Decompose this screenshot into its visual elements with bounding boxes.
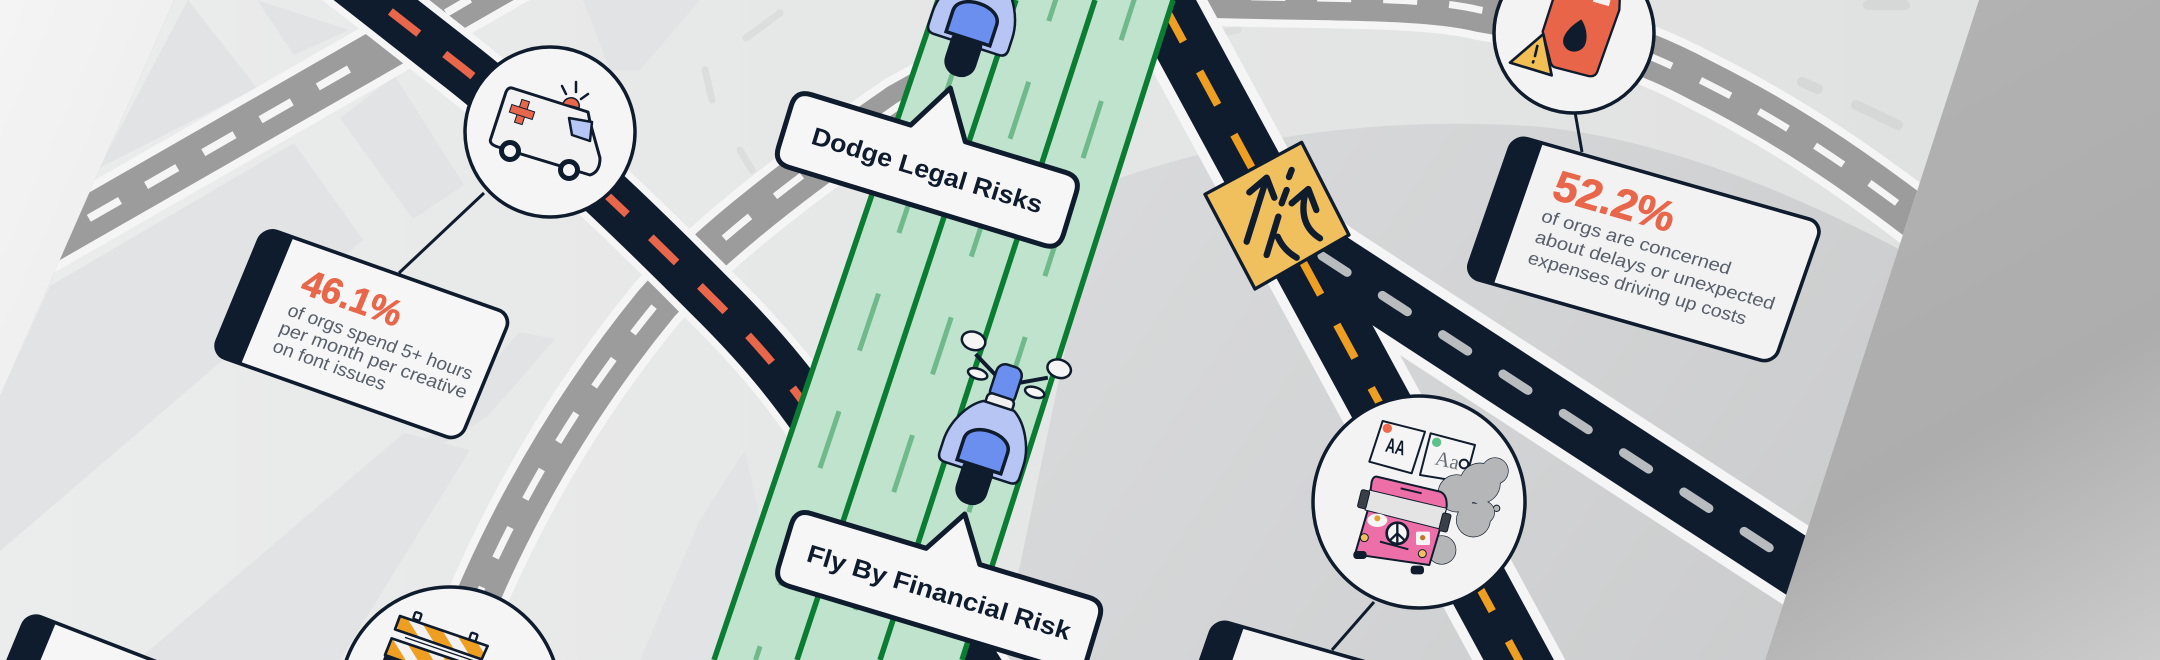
connector: fuel to stat card: [1575, 112, 1582, 152]
stat card: 46.1%: on font issues: [270, 335, 390, 394]
circle icon: broken-down bus with font cards: [1313, 396, 1525, 608]
font card AA: [1369, 421, 1425, 473]
stat card: 52.2%: [1465, 135, 1823, 364]
callout: Fly By Financial Risk: [775, 510, 1104, 660]
circle icon: ambulance: [465, 47, 635, 217]
scooter: lower: [938, 330, 1072, 506]
stat card: 52.2%: expenses driving up costs: [1525, 248, 1749, 329]
stat card: 52.2%: about delays or unexpected: [1533, 227, 1778, 314]
inner darker district: [1000, 124, 1910, 660]
road: grey curved arc: [450, 0, 1920, 602]
stat card: 52.2%: 52.2%: [1547, 162, 1682, 242]
road: dark yellow-dashed with merging branch: [1150, 0, 1860, 660]
font card Aa: [1420, 433, 1475, 482]
circle icon: road barrier: [340, 587, 560, 660]
map blocks: [0, 44, 167, 660]
stat card: 52.2%: of orgs are concerned: [1539, 206, 1734, 278]
scooter: top: [926, 0, 1016, 78]
lane dashes: [756, 0, 1140, 660]
smoke: [1427, 457, 1509, 565]
faint road marks: [705, 5, 1905, 170]
callout: Fly By Financial Risk: Fly By Financial Risk: [804, 540, 1074, 646]
callout: Dodge Legal Risks: [774, 86, 1080, 249]
icon: merge sign: [1205, 142, 1349, 289]
stat card: bottom right, cropped: [1198, 620, 1366, 660]
stat card: 46.1%: of orgs spend 5+ hours: [285, 299, 476, 384]
road: straight grey top-left: [0, 0, 520, 269]
background: light area left of page: [0, 0, 174, 396]
font card Aa: Aa: [1433, 448, 1461, 475]
stat card: 46.1%: [212, 227, 512, 441]
lane lines: [714, 0, 1173, 660]
font card AA: AA: [1384, 434, 1408, 460]
stat card: 46.1%: per month per creative: [276, 317, 471, 402]
road: dark red-dashed: [340, 0, 990, 660]
callout: Dodge Legal Risks: Dodge Legal Risks: [808, 122, 1046, 219]
connector: bus to stat card: [1332, 602, 1374, 650]
stat card: bottom left, cropped: [6, 614, 157, 660]
bus: [1355, 477, 1447, 565]
green lanes band: [714, 0, 1173, 660]
stat card: 46.1%: 46.1%: [296, 262, 409, 334]
circle icon: fuel can with warning: [1494, 0, 1654, 113]
connector: ambulance to stat card: [399, 193, 484, 273]
